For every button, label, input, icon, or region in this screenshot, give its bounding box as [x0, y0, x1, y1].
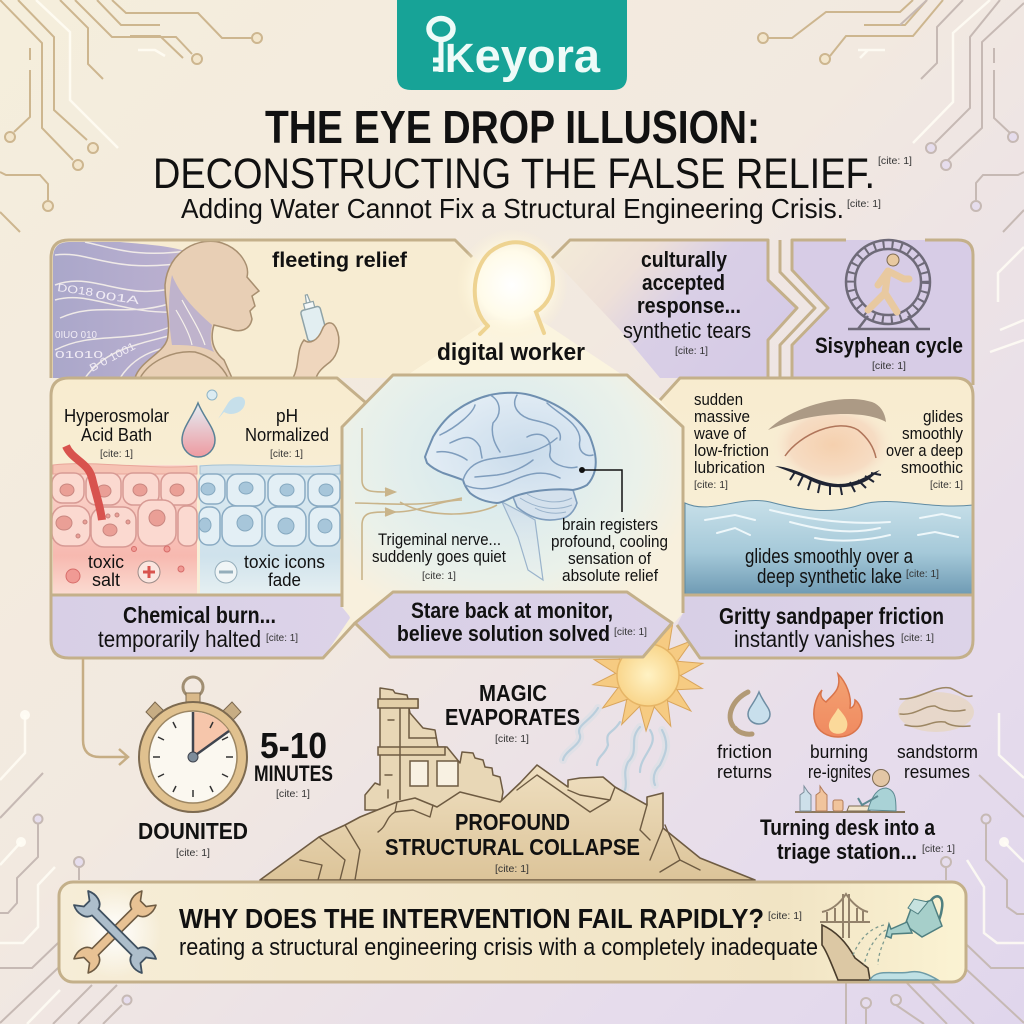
icon: friction returns — [717, 692, 772, 782]
panel: Gritty sandpaper friction: wave of — [693, 424, 746, 443]
panel: Gritty sandpaper friction — [660, 378, 973, 658]
countdown label: [cite: 1] — [176, 848, 210, 859]
panel: chemical burn: toxic icons — [244, 552, 325, 572]
panel: brain: suddenly goes quiet — [372, 547, 506, 566]
band: chemical burn caption — [51, 595, 350, 658]
icon: hamster wheel with runner — [846, 240, 930, 329]
band: stare back caption: believe solution solved — [397, 621, 610, 646]
panel: chemical burn: toxic — [88, 552, 124, 572]
ruin labels: [cite: 1] — [495, 864, 529, 875]
hair with data streams: 01010 — [55, 350, 104, 361]
closed eye — [768, 399, 895, 495]
panel: brain — [342, 375, 683, 658]
panel: Gritty sandpaper friction: lubrication — [694, 458, 765, 477]
panel: Gritty sandpaper friction: [cite: 1] — [694, 480, 728, 491]
ruined wall — [365, 688, 503, 810]
icon: burning flame: burning — [810, 742, 868, 762]
panel: chemical burn: Acid Bath — [81, 425, 152, 445]
panel: culturally accepted response — [552, 240, 815, 378]
ruin labels: STRUCTURAL COLLAPSE — [385, 834, 640, 860]
evaporation waves — [563, 708, 666, 790]
band: stare back caption: [cite: 1] — [614, 627, 647, 638]
panel: Sisyphean cycle: Sisyphean cycle — [815, 333, 963, 358]
panel: Sisyphean cycle — [792, 240, 973, 385]
icon: burning flame — [808, 674, 871, 782]
halo and digital worker: digital worker — [437, 339, 585, 366]
icon: burning flame: re-ignites — [808, 762, 871, 782]
panel: why the intervention fails — [59, 882, 966, 982]
countdown label: 5-10 — [260, 725, 327, 766]
panel: Gritty sandpaper friction: [cite: 1] — [930, 480, 963, 491]
panel: Gritty sandpaper friction: smoothic — [901, 458, 963, 477]
icon: key — [429, 18, 453, 72]
red damaged tissue — [52, 446, 197, 595]
hair with data streams: 0IUO 010 — [55, 330, 97, 341]
band: gritty sandpaper caption: Gritty sandpaper friction — [719, 603, 944, 629]
brain — [425, 393, 596, 580]
icon: bridge on crumbling cliff — [820, 894, 870, 980]
panel: brain: Trigeminal nerve... — [378, 530, 501, 549]
icon: triage desk — [795, 770, 905, 812]
panel: Gritty sandpaper friction: over a deep — [886, 441, 963, 460]
title: [cite: 1] — [847, 199, 881, 210]
panel: fleeting relief — [51, 240, 480, 378]
panel: why the intervention fails: [cite: 1] — [768, 911, 802, 922]
panel: chemical burn — [51, 378, 365, 658]
figure in profile — [135, 241, 259, 378]
band: stare back caption: Stare back at monitor, — [411, 598, 613, 623]
hair with data streams: DO18 — [57, 282, 94, 299]
panel: culturally accepted response: [cite: 1] — [675, 346, 708, 357]
ruin labels: PROFOUND — [455, 809, 570, 835]
countdown label: [cite: 1] — [276, 789, 310, 800]
panel: brain: profound, cooling — [551, 532, 668, 551]
title: [cite: 1] — [878, 156, 912, 167]
panel: brain: absolute relief — [562, 566, 658, 585]
arrow: to stopwatch — [83, 658, 128, 765]
panel: why the intervention fails: WHY DOES THE INTERVENTION FAIL RAPIDLY? — [179, 903, 764, 934]
panel: chemical burn: fade — [268, 570, 301, 590]
rubble mound — [260, 765, 755, 880]
panel: Sisyphean cycle: [cite: 1] — [872, 361, 906, 372]
ruin labels: EVAPORATES — [445, 704, 580, 730]
panel: Gritty sandpaper friction: smoothly — [902, 424, 963, 443]
ruin labels — [385, 680, 640, 875]
title: DECONSTRUCTING THE FALSE RELIEF. — [153, 150, 875, 198]
halo and digital worker — [340, 229, 690, 420]
panel: Gritty sandpaper friction: massive — [694, 407, 750, 426]
title — [153, 101, 912, 224]
triage label: [cite: 1] — [922, 844, 955, 855]
synthetic lake — [685, 500, 973, 595]
icon: sandstorm: sandstorm — [897, 742, 978, 762]
panel: Gritty sandpaper friction: low-friction — [694, 441, 769, 460]
title: Adding Water Cannot Fix a Structural Engineering Crisis. — [181, 193, 844, 224]
panel: Gritty sandpaper friction: glides — [923, 407, 963, 426]
triage label: triage station... — [777, 839, 917, 864]
panel: Gritty sandpaper friction: [cite: 1] — [906, 569, 939, 580]
panel: chemical burn: salt — [92, 570, 120, 590]
panel: chemical burn: [cite: 1] — [100, 449, 133, 460]
title: THE EYE DROP ILLUSION: — [265, 101, 760, 153]
eye drop bottle and hand — [293, 292, 339, 378]
panel: chemical burn: [cite: 1] — [270, 449, 303, 460]
countdown label: DOUNITED — [138, 818, 248, 844]
icon: water drop — [182, 390, 245, 457]
panel: chemical burn: Normalized — [245, 425, 329, 445]
logo: Keyora — [445, 29, 601, 82]
panel: Gritty sandpaper friction: sudden — [694, 390, 743, 409]
logo — [397, 0, 627, 90]
band: gritty sandpaper caption — [677, 595, 973, 658]
panel: chemical burn: Hyperosmolar — [64, 406, 169, 426]
ruin labels: MAGIC — [479, 680, 547, 706]
panel: Gritty sandpaper friction: glides smoothly over a — [745, 546, 914, 568]
band: gritty sandpaper caption: [cite: 1] — [901, 633, 934, 644]
icon: friction returns: returns — [717, 762, 772, 782]
icon: stopwatch — [139, 677, 247, 812]
panel: Gritty sandpaper friction: deep synthetic lake — [757, 566, 902, 588]
icon: water pouring — [852, 925, 938, 980]
countdown label: MINUTES — [254, 761, 333, 786]
triage label: Turning desk into a — [760, 815, 936, 840]
countdown label — [138, 725, 333, 859]
band: stare back caption — [355, 592, 672, 657]
icon: watering can — [886, 896, 942, 938]
icon: friction returns: friction — [717, 742, 772, 762]
triage label — [760, 815, 955, 864]
panel: brain: sensation of — [568, 549, 651, 568]
panel: brain: [cite: 1] — [422, 571, 456, 582]
hair with data streams — [53, 242, 205, 378]
band: chemical burn caption: temporarily halted — [98, 626, 261, 652]
ruin labels: [cite: 1] — [495, 734, 529, 745]
panel: culturally accepted response: response... — [637, 293, 741, 318]
panel: culturally accepted response: synthetic tears — [623, 318, 751, 343]
panel: brain: brain registers — [562, 515, 658, 534]
panel: culturally accepted response: culturally — [641, 247, 728, 272]
blue normalized tissue — [199, 465, 340, 595]
hair with data streams: B 0 1001 — [88, 341, 138, 375]
band: chemical burn caption: Chemical burn... — [123, 602, 276, 628]
panel: why the intervention fails: reating a structural engineering crisis with a completely inadequate — [179, 934, 818, 961]
panel: culturally accepted response: accepted — [642, 270, 725, 295]
hair with data streams: 001A — [95, 289, 141, 307]
icon: sun — [591, 619, 705, 731]
panel: chemical burn: pH — [276, 406, 298, 426]
nerve lines — [355, 428, 497, 580]
icon: sandstorm — [897, 688, 978, 782]
band: gritty sandpaper caption: instantly vanishes — [734, 626, 895, 652]
icon: sandstorm: resumes — [904, 762, 970, 782]
illustration: ruined building and rubble — [260, 688, 755, 880]
icon: crossed wrenches — [69, 886, 161, 978]
heading: fleeting relief — [272, 249, 408, 272]
band: chemical burn caption: [cite: 1] — [266, 633, 298, 644]
callout line — [579, 467, 622, 512]
